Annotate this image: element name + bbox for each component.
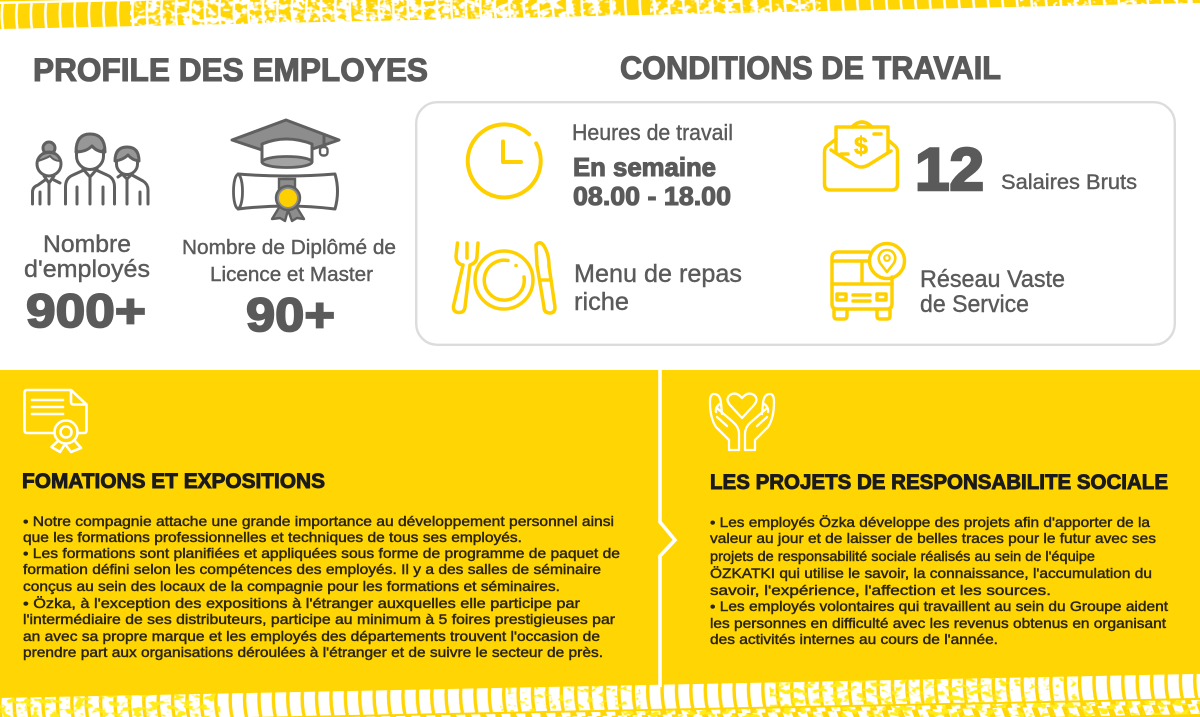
text block: projets: projets de responsabilité sociale réalisés au sein de l'équipe: [710, 548, 1095, 564]
label: nombre d'employes: [24, 231, 150, 283]
label: nombre de diplome: [182, 237, 396, 286]
panel: yellow background: [0, 370, 1200, 717]
label: nombre de diplome: Nombre de Diplômé de: [182, 237, 396, 259]
icon: certificate: [24, 390, 86, 452]
text block: projets: savoir, l'expérience, l'affection et les sources.: [710, 582, 1051, 598]
text: salaires bruts: Salaires Bruts: [1001, 171, 1137, 194]
heading: profile des employes: PROFILE DES EMPLOYES: [33, 52, 428, 88]
number: 12: 12: [915, 136, 984, 203]
text: reseau vaste de service: de Service: [920, 291, 1029, 318]
text: heures de travail: [572, 120, 733, 211]
text: menu de repas riche: Menu de repas: [574, 260, 742, 288]
icon: hands holding heart: [710, 394, 774, 450]
heading: conditions de travail: CONDITIONS DE TRAVAIL: [620, 50, 1001, 86]
panel: conditions de travail: [416, 102, 1175, 345]
text: heures de travail: Heures de travail: [572, 120, 733, 145]
divider with chevron: [660, 370, 675, 687]
number: 90+: 90+: [246, 288, 335, 341]
heading: fomations et expositions: FOMATIONS ET EXPOSITIONS: [22, 470, 325, 493]
icon: bus with location pin: [832, 244, 904, 319]
text: menu de repas riche: [574, 260, 742, 316]
text block: formations: • Notre compagnie attache une grande importance au développement personnel ainsi: [23, 513, 614, 529]
text block: formations: formation défini selon les compétences des employés. Il y a des salles de séminaire: [23, 561, 601, 577]
text: reseau vaste de service: Réseau Vaste: [920, 266, 1065, 293]
panel: formations et expositions: [22, 390, 620, 660]
icon: graduation cap and diploma: [232, 120, 339, 221]
icon: salary envelope: [824, 122, 898, 190]
text block: formations: an avec sa propre marque et les employés des départements trouvent l'occasion de: [23, 628, 600, 644]
panel: responsabilite sociale: [710, 394, 1168, 647]
text block: formations: conçus au sein des locaux de la compagnie pour les formations et séminaires.: [23, 578, 560, 594]
text block: projets: les personnes en difficulté avec les revenus obtenus en organisant: [710, 615, 1166, 631]
icon: clock: [468, 124, 541, 197]
text block: formations: prendre part aux organisations déroulées à l'étranger et de suivre le secteur de près.: [23, 644, 603, 660]
text: heures de travail: En semaine: [573, 152, 716, 182]
text: menu de repas riche: riche: [574, 288, 629, 316]
panel: employee profile: [24, 120, 396, 341]
text block: formations: [23, 513, 620, 660]
text block: formations: • Özka, à l'exception des expositions à l'étranger auxquelles elle participe par: [23, 594, 580, 611]
text block: projets: valeur au jour et de laisser de belles traces pour le futur avec ses: [710, 530, 1156, 546]
icon: employees: [32, 134, 148, 204]
text block: projets: [710, 513, 1168, 647]
top tire track band: [0, 0, 1200, 30]
text block: formations: • Les formations sont planifiées et appliquées sous forme de programme de paquet de: [23, 545, 620, 561]
text: heures de travail: 08.00 - 18.00: [573, 181, 731, 211]
bottom tire track band: [0, 673, 1200, 717]
label: nombre d'employes: Nombre: [43, 231, 131, 258]
label: nombre d'employes: d'employés: [24, 256, 150, 283]
heading: les projets de responsabilite sociale: LES PROJETS DE RESPONSABILITE SOCIALE: [710, 471, 1168, 494]
icon: cutlery and plate: [453, 243, 555, 313]
text block: projets: ÖZKATKI qui utilise le savoir, la connaissance, l'accumulation du: [710, 564, 1152, 581]
text block: projets: • Les employés volontaires qui travaillent au sein du Groupe aident: [710, 598, 1168, 614]
number: 900+: 900+: [26, 284, 146, 337]
text block: formations: l'intermédiaire de ses distributeurs, participe au minimum à 5 foires prestigieuses par: [23, 611, 615, 627]
text block: formations: que les formations professionnelles et techniques de tous ses employés.: [23, 529, 522, 545]
label: nombre de diplome: Licence et Master: [210, 264, 373, 286]
text block: projets: des activités internes au cours de l'année.: [710, 631, 998, 647]
icon: dollar sign: $: [854, 132, 868, 160]
text: reseau vaste de service: [920, 266, 1065, 318]
text block: projets: • Les employés Özka développe des projets afin d'apporter de la: [710, 513, 1150, 530]
